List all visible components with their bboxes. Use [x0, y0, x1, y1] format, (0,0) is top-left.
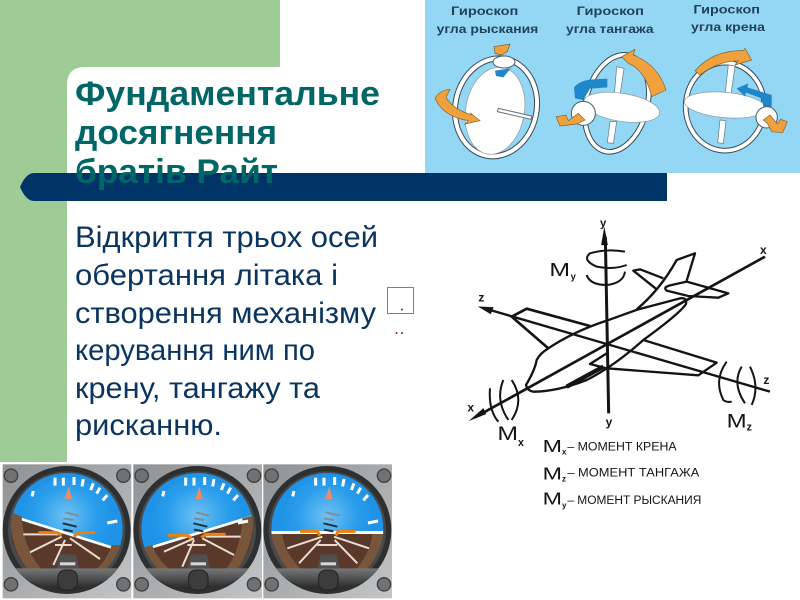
green background panel: [0, 0, 280, 462]
body text: крену, тангажу та: [75, 372, 321, 405]
indicator: banked right: [0, 464, 133, 598]
gyroscope captions: Гироскоп: [451, 5, 518, 18]
airplane axes diagram: [467, 218, 770, 510]
indicator: level: [261, 464, 394, 598]
gyroscope captions: угла крена: [691, 21, 766, 34]
moment legend: [543, 436, 701, 510]
attitude indicators: [0, 464, 394, 598]
body text: [75, 221, 378, 442]
axis z: [487, 309, 770, 392]
gyroscope captions: Гироскоп: [577, 5, 644, 18]
axis and moment labels: z: [763, 373, 769, 387]
gyroscope: roll: [683, 48, 787, 151]
title: досягнення: [75, 114, 277, 152]
body text: Відкриття трьох осей: [75, 221, 378, 254]
axis and moment labels: М: [549, 259, 570, 280]
title: [75, 75, 380, 191]
title: Фундаментальне: [75, 75, 380, 113]
body text: обертання літака і: [75, 259, 338, 292]
body text: рисканню.: [75, 409, 222, 442]
axis and moment labels: у: [606, 415, 613, 429]
indicator: banked left: [131, 464, 264, 598]
gyroscope: pitch: [556, 48, 666, 159]
axis and moment labels: х: [467, 401, 474, 415]
moment legend: z: [562, 474, 566, 483]
moment legend: – МОМЕНТ РЫСКАНИЯ: [567, 493, 701, 507]
gyroscope: yaw: [435, 44, 546, 164]
moment legend: М: [543, 489, 562, 509]
axis and moment labels: х: [760, 243, 767, 257]
axis x: [475, 257, 765, 417]
axis y: [605, 237, 609, 413]
axis and moment labels: у: [571, 271, 577, 281]
axis and moment labels: у: [600, 218, 607, 230]
axis and moment labels: [467, 218, 769, 449]
axis and moment labels: М: [497, 424, 518, 445]
airplane outline: [512, 253, 728, 392]
gyroscope captions: угла тангажа: [566, 23, 654, 36]
gyroscope captions: [437, 3, 766, 36]
moment legend: у: [562, 501, 567, 510]
rotation arcs: [490, 250, 755, 422]
moment legend: – МОМЕНТ ТАНГАЖА: [567, 466, 699, 480]
gyroscope captions: Гироскоп: [693, 3, 760, 16]
moment legend: – МОМЕНТ КРЕНА: [567, 440, 677, 454]
small placeholder box: [388, 288, 414, 334]
navy title bar: [20, 173, 667, 201]
moment legend: М: [543, 436, 562, 456]
moment legend: х: [562, 448, 567, 457]
body text: керування ним по: [75, 334, 315, 367]
gyroscope captions: угла рыскания: [437, 23, 538, 36]
axis and moment labels: z: [478, 291, 484, 305]
axis and moment labels: М: [727, 411, 747, 432]
axis and moment labels: z: [747, 422, 752, 434]
axis and moment labels: х: [518, 437, 524, 449]
title: братів Райт: [75, 153, 278, 191]
body text: створення механізму: [75, 297, 376, 330]
moment legend: М: [543, 463, 562, 483]
gyroscope illustration panel: [425, 0, 800, 173]
